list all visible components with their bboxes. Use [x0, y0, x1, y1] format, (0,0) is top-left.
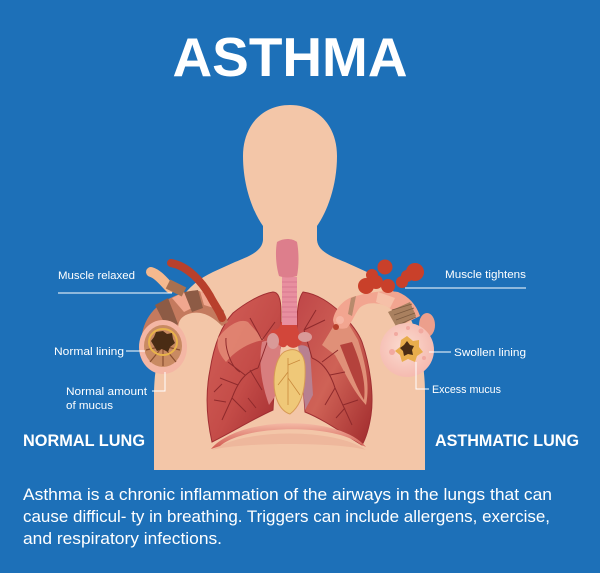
label: muscle relaxed: Muscle relaxed	[58, 270, 135, 282]
relaxed muscle band: red	[171, 263, 222, 318]
label: swollen lining: Swollen lining	[454, 347, 526, 359]
heading: asthmatic lung: ASTHMATIC LUNG	[435, 432, 579, 450]
radial lining stripes	[146, 346, 180, 366]
description text: Asthma is a chronic inflammation of the airways in the lungs that can	[23, 485, 552, 504]
right airway tube	[333, 291, 435, 337]
larynx	[276, 239, 298, 278]
label: muscle tightens: Muscle tightens	[445, 269, 527, 281]
description text	[23, 485, 552, 548]
description text: cause difficul- ty in breathing. Triggers can include allergens, exercise,	[23, 507, 550, 526]
constricted muscle clusters	[358, 260, 424, 294]
label: excess mucus: Excess mucus	[432, 384, 501, 396]
relaxed muscle band: pale	[151, 272, 170, 288]
label lines	[58, 288, 526, 391]
right lung	[297, 292, 372, 445]
trachea rings	[282, 282, 297, 317]
heading: normal lung: NORMAL LUNG	[23, 432, 145, 450]
description text: and respiratory infections.	[23, 529, 222, 548]
label: normal amount of mucus	[66, 386, 147, 412]
heart	[274, 350, 305, 414]
label: normal lining: Normal lining	[54, 346, 124, 358]
title: ASTHMA	[172, 26, 408, 88]
left airway tube	[142, 290, 228, 338]
heart vessels	[278, 358, 300, 405]
human silhouette	[154, 105, 425, 470]
pulmonary nodes	[267, 332, 312, 349]
bronchi	[270, 322, 302, 348]
diaphragm	[211, 423, 366, 449]
trachea	[282, 277, 297, 325]
veins: left lung	[214, 318, 275, 420]
label: normal amount of mucus: of mucus	[66, 400, 114, 412]
left lung	[207, 292, 281, 442]
label: normal amount of mucus: Normal amount	[66, 386, 147, 398]
left airway cross-section	[139, 320, 187, 374]
diaphragm shadow	[212, 434, 366, 450]
right airway cross-section	[380, 323, 434, 377]
relaxed muscle band: striped	[168, 284, 184, 292]
veins: right lung	[304, 310, 358, 425]
